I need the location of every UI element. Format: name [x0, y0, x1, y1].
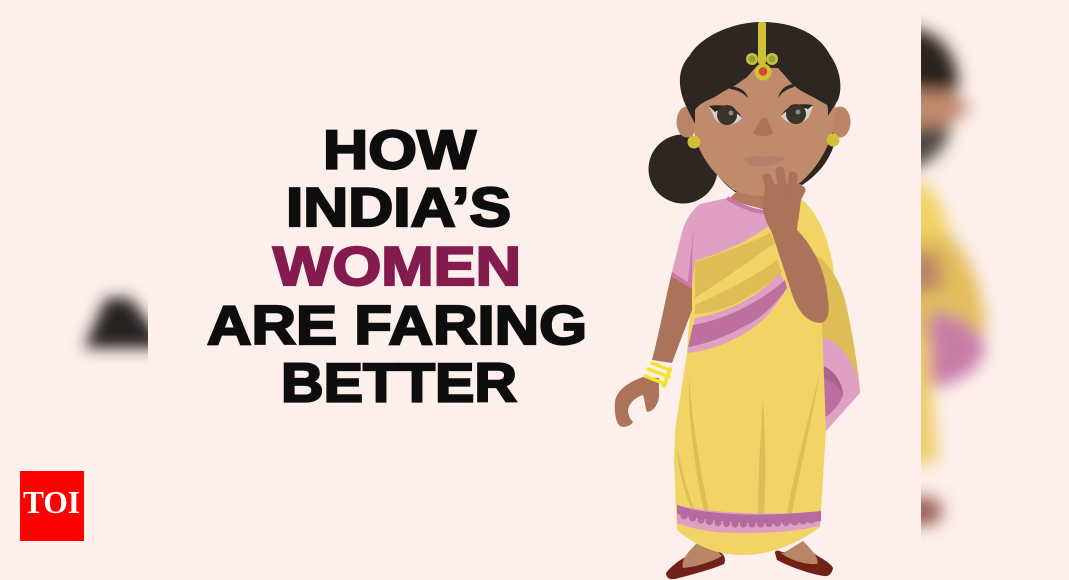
illustration: woman in yellow sari [615, 22, 860, 579]
right arm and hand [763, 171, 829, 323]
eyebrows [730, 84, 794, 98]
pink sash [687, 273, 787, 353]
right ear [830, 106, 850, 138]
right eye [781, 104, 813, 124]
title line: BETTER: BETTER [281, 352, 517, 414]
nose [753, 118, 773, 136]
front hair [680, 22, 840, 124]
skirt pleats [677, 372, 820, 515]
right drape [795, 195, 860, 432]
left hand [615, 377, 659, 427]
TOI logo: TOI [23, 484, 80, 520]
title line: ARE FARING: ARE FARING [207, 294, 587, 356]
left arm [652, 272, 692, 363]
headpiece [746, 22, 778, 80]
title [207, 118, 587, 414]
left foot and shoe [666, 543, 725, 579]
face [692, 55, 835, 196]
blurred backdrop: left letter fragment [84, 298, 168, 348]
hair bun [648, 134, 718, 204]
left ear [676, 106, 698, 138]
back hair [700, 130, 837, 192]
title line: INDIA'S: INDIA’S [286, 176, 511, 238]
bangles [645, 363, 670, 386]
blurred backdrop: right figure fragment [905, 28, 986, 525]
sleeve trim [671, 272, 692, 289]
earrings [688, 134, 840, 148]
right foot and shoe [775, 541, 833, 576]
title line: HOW: HOW [323, 118, 476, 180]
TOI logo [20, 471, 84, 541]
skirt [674, 225, 826, 555]
title line: WOMEN: WOMEN [273, 235, 521, 297]
blouse [672, 198, 790, 285]
neck [728, 190, 785, 215]
sari pallu over chest [695, 225, 800, 318]
left eye [709, 105, 742, 125]
mouth [743, 156, 785, 167]
skirt border [677, 505, 821, 533]
